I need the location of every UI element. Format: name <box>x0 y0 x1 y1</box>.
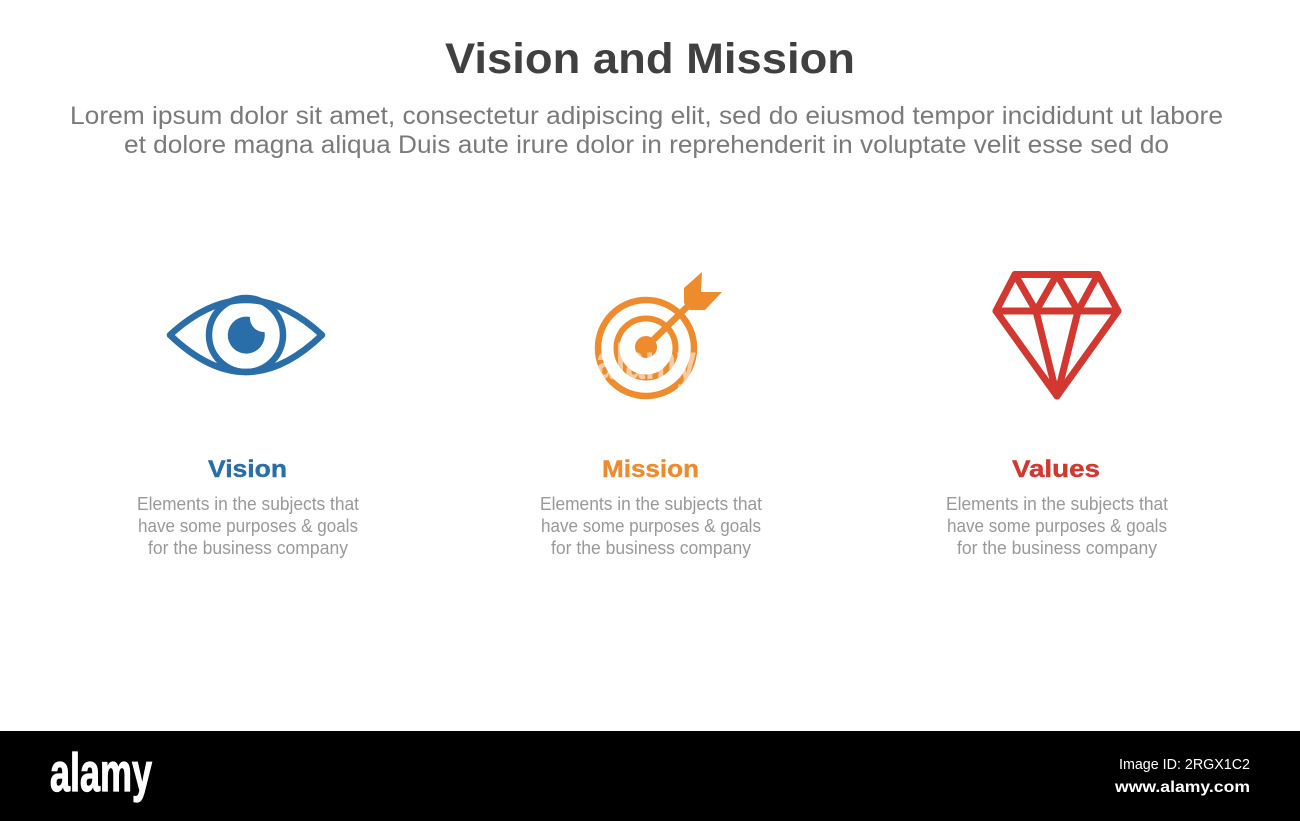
description: values: Elements in the subjects that <box>946 494 1168 514</box>
heading: values: Values <box>1012 456 1100 483</box>
panel: mission <box>540 272 762 558</box>
intro text: et dolore magna aliqua Duis aute irure dolor in reprehenderit in voluptate velit esse sed do <box>124 131 1169 159</box>
image id: Image ID: 2RGX1C2 <box>1119 756 1250 773</box>
footer logo: alamy <box>50 743 152 803</box>
heading: vision: Vision <box>208 456 287 483</box>
description: mission: have some purposes & goals <box>541 516 761 536</box>
intro text <box>70 102 1223 159</box>
intro text: Lorem ipsum dolor sit amet, consectetur adipiscing elit, sed do eiusmod tempor incididunt ut labore <box>70 102 1223 130</box>
icon: target with arrow <box>596 272 722 396</box>
panel: values <box>946 274 1168 558</box>
website: www.alamy.com <box>1114 779 1250 796</box>
description: vision: for the business company <box>148 538 348 558</box>
title: Vision and Mission <box>445 35 855 83</box>
description: mission: Elements in the subjects that <box>540 494 762 514</box>
heading: mission: Mission <box>602 456 699 483</box>
watermark over target: alamy <box>596 334 696 390</box>
panel: vision <box>137 298 359 558</box>
description: values <box>946 494 1168 558</box>
description: vision: Elements in the subjects that <box>137 494 359 514</box>
footer bar <box>0 731 1300 821</box>
description: values: for the business company <box>957 538 1157 558</box>
icon: diamond <box>996 274 1118 396</box>
description: mission <box>540 494 762 558</box>
description: values: have some purposes & goals <box>947 516 1167 536</box>
icon: eye <box>170 298 322 372</box>
description: mission: for the business company <box>551 538 751 558</box>
description: vision: have some purposes & goals <box>138 516 358 536</box>
description: vision <box>137 494 359 558</box>
